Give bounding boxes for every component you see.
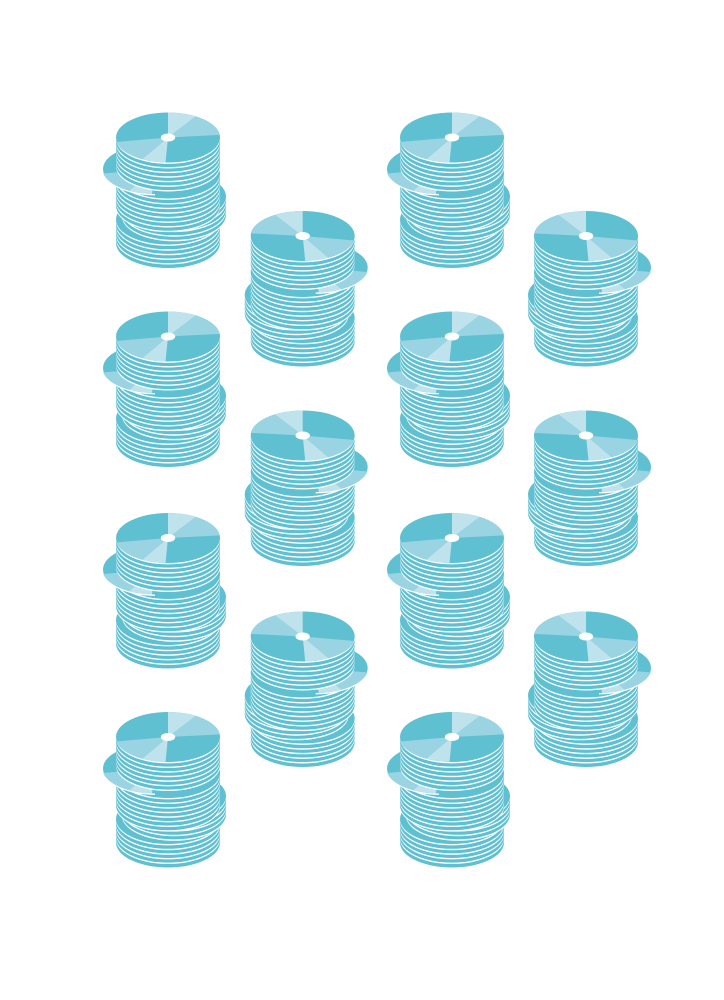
- disc stack: column 1, row 1: [103, 112, 226, 268]
- disc stack: column 1, row 4: [103, 712, 226, 868]
- disc stack: column 3, row 2: [387, 312, 510, 467]
- disc stack: column 1, row 2: [103, 312, 226, 467]
- disc stack: column 3, row 3: [387, 513, 510, 668]
- disc stack: column 1, row 3: [103, 513, 226, 668]
- disc stack: column 3, row 1: [387, 112, 510, 268]
- disc stack: column 2, row 2: [245, 410, 368, 566]
- disc stack: column 2, row 1: [245, 211, 368, 366]
- disc stack: column 4, row 2: [528, 410, 651, 566]
- disc stack: column 2, row 3: [245, 612, 368, 767]
- disc stack: column 3, row 4: [387, 712, 510, 868]
- disc stack: column 4, row 1: [528, 211, 651, 366]
- disc stack: column 4, row 3: [528, 612, 651, 767]
